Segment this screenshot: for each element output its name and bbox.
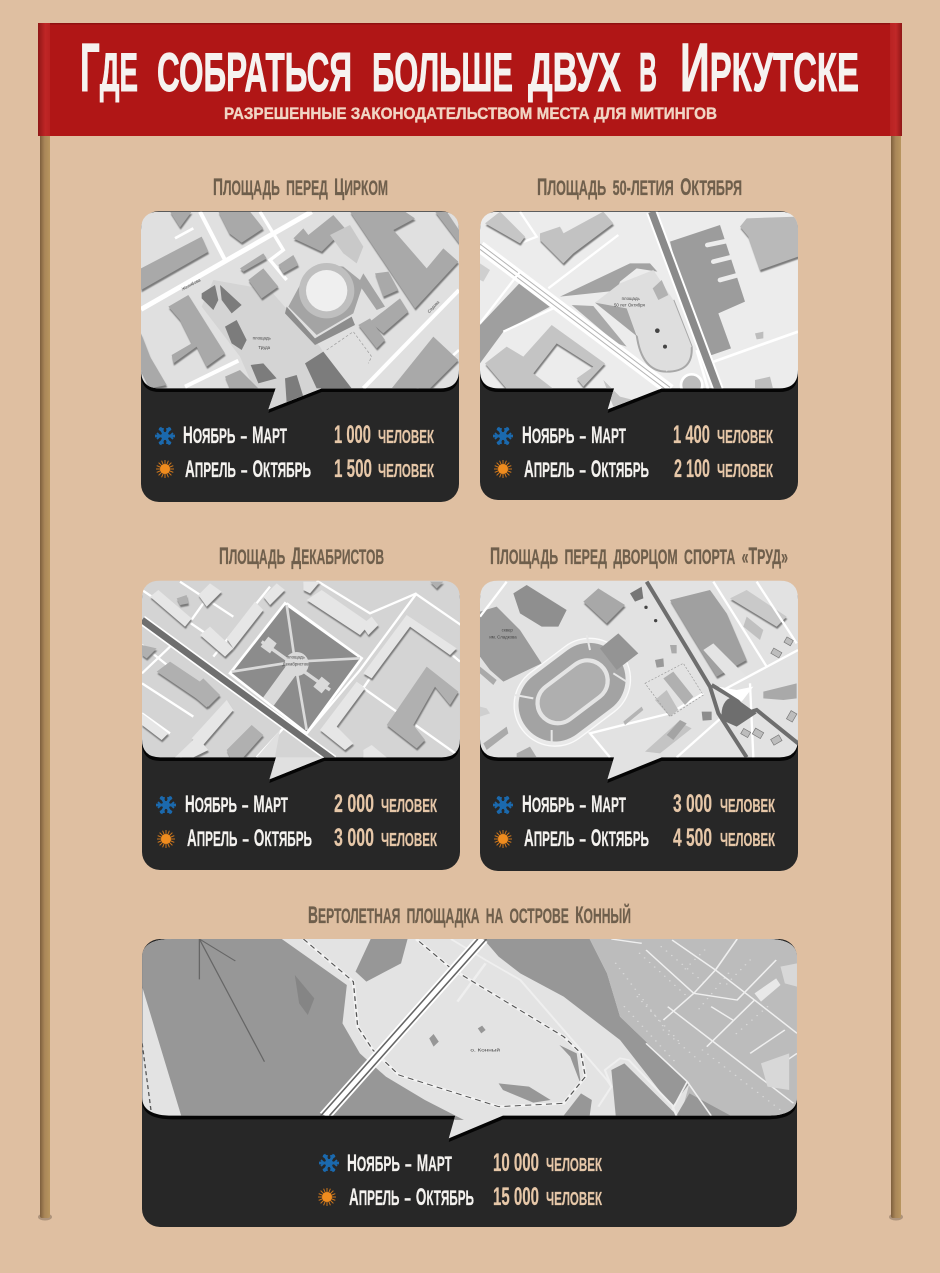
map: circus square: Желябова — [181, 277, 202, 292]
heading: Konny island helipad: ВЕРТОЛЕТНАЯ ПЛОЩАДКА НА ОСТРОВЕ КОННЫЙ — [308, 902, 631, 929]
icon: snowflake — [493, 796, 513, 814]
legend: summer: АПРЕЛЬ – ОКТЯБРЬ — [187, 825, 312, 852]
legend: winter — [319, 1149, 603, 1177]
legend: winter: НОЯБРЬ – МАРТ — [522, 791, 626, 818]
panel: Trud sports palace square — [470, 570, 810, 871]
map: Decembrists square — [142, 580, 460, 783]
legend: summer: 4 500 — [673, 824, 712, 852]
legend: winter: ЧЕЛОВЕК — [717, 427, 774, 447]
legend: summer: ЧЕЛОВЕК — [720, 830, 776, 850]
legend: winter: 1 400 — [673, 421, 710, 449]
legend: winter — [493, 790, 776, 818]
legend: winter: НОЯБРЬ – МАРТ — [522, 422, 626, 449]
legend: summer: АПРЕЛЬ – ОКТЯБРЬ — [349, 1184, 474, 1211]
legend: summer — [494, 455, 774, 483]
title: БОЛЬШЕ — [372, 41, 513, 103]
legend: winter — [493, 421, 774, 449]
legend: summer — [156, 455, 435, 483]
left flag pole — [38, 130, 52, 1220]
legend: winter: НОЯБРЬ – МАРТ — [183, 422, 287, 449]
legend: winter: НОЯБРЬ – МАРТ — [185, 791, 288, 818]
panel: Konny island helipad — [130, 930, 824, 1227]
title: ГДЕ — [80, 29, 138, 106]
title: ДВУХ — [528, 41, 621, 103]
panel: circus square — [130, 200, 470, 502]
legend: summer — [318, 1183, 603, 1211]
legend: winter: ЧЕЛОВЕК — [378, 427, 435, 447]
legend: summer: ЧЕЛОВЕК — [546, 1189, 603, 1209]
legend: summer: 3 000 — [334, 824, 374, 852]
icon: snowflake — [493, 427, 513, 445]
legend: winter: 10 000 — [493, 1149, 539, 1177]
title — [80, 29, 859, 106]
heading: Decembrists square: ПЛОЩАДЬ ДЕКАБРИСТОВ — [219, 543, 384, 570]
legend: summer: АПРЕЛЬ – ОКТЯБРЬ — [524, 456, 649, 483]
right flag pole — [889, 130, 903, 1220]
title: В — [639, 41, 657, 103]
legend: winter: 3 000 — [673, 790, 712, 818]
subtitle: РАЗРЕШЕННЫЕ ЗАКОНОДАТЕЛЬСТВОМ МЕСТА ДЛЯ МИТИНГОВ — [224, 105, 717, 123]
map: October square: 50 лет Октября — [614, 303, 645, 308]
red banner — [38, 23, 902, 136]
legend: winter: ЧЕЛОВЕК — [381, 796, 438, 816]
heading: Trud sports palace square: ПЛОЩАДЬ ПЕРЕД ДВОРЦОМ СПОРТА «ТРУД» — [490, 543, 788, 570]
legend: winter — [155, 421, 435, 449]
legend: summer: ЧЕЛОВЕК — [378, 461, 435, 481]
icon: sun — [494, 830, 512, 848]
title: СОБРАТЬСЯ — [157, 41, 352, 103]
legend: winter: ЧЕЛОВЕК — [720, 796, 776, 816]
legend: summer: ЧЕЛОВЕК — [381, 830, 438, 850]
panel: Decembrists square — [130, 570, 470, 870]
legend: winter: НОЯБРЬ – МАРТ — [347, 1150, 452, 1177]
icon: snowflake — [319, 1154, 339, 1172]
icon: sun — [494, 460, 512, 478]
icon: snowflake — [156, 796, 176, 814]
legend: summer — [157, 824, 438, 852]
map: October square: площадь — [622, 296, 640, 301]
legend: summer: ЧЕЛОВЕК — [717, 461, 774, 481]
map: circus square: площадь — [253, 335, 271, 340]
icon: sun — [156, 460, 174, 478]
map: Trud sports palace square — [480, 580, 798, 783]
heading: circus square: ПЛОЩАДЬ ПЕРЕД ЦИРКОМ — [213, 174, 388, 201]
icon: snowflake — [155, 427, 175, 445]
legend: winter — [156, 790, 438, 818]
icon: sun — [318, 1188, 336, 1206]
map: Konny island: о. Конный — [470, 1047, 500, 1053]
legend: summer: 2 100 — [674, 455, 710, 483]
legend: winter: 1 000 — [334, 421, 371, 449]
map: Decembrists square: площадь — [287, 654, 305, 659]
map: circus square: Седова — [426, 299, 441, 314]
map: circus square: Труда — [258, 345, 271, 350]
map: Trud sports palace square: сквер — [502, 628, 513, 633]
map: Konny island — [142, 939, 797, 1142]
icon: sun — [157, 830, 175, 848]
map: October square — [480, 212, 798, 413]
legend: summer: 15 000 — [493, 1183, 539, 1211]
map: Decembrists square: Декабристов — [283, 662, 309, 667]
legend: summer: АПРЕЛЬ – ОКТЯБРЬ — [524, 825, 649, 852]
legend: summer — [494, 824, 776, 852]
legend: summer: 1 500 — [334, 455, 372, 483]
panel: October square — [470, 200, 810, 500]
heading: October square: ПЛОЩАДЬ 50-ЛЕТИЯ ОКТЯБРЯ — [537, 174, 742, 201]
legend: winter: 2 000 — [334, 790, 374, 818]
map: Trud sports palace square: им. Сладкова — [489, 634, 517, 639]
legend: winter: ЧЕЛОВЕК — [546, 1155, 603, 1175]
map: circus square — [141, 212, 459, 413]
legend: summer: АПРЕЛЬ – ОКТЯБРЬ — [185, 456, 311, 483]
